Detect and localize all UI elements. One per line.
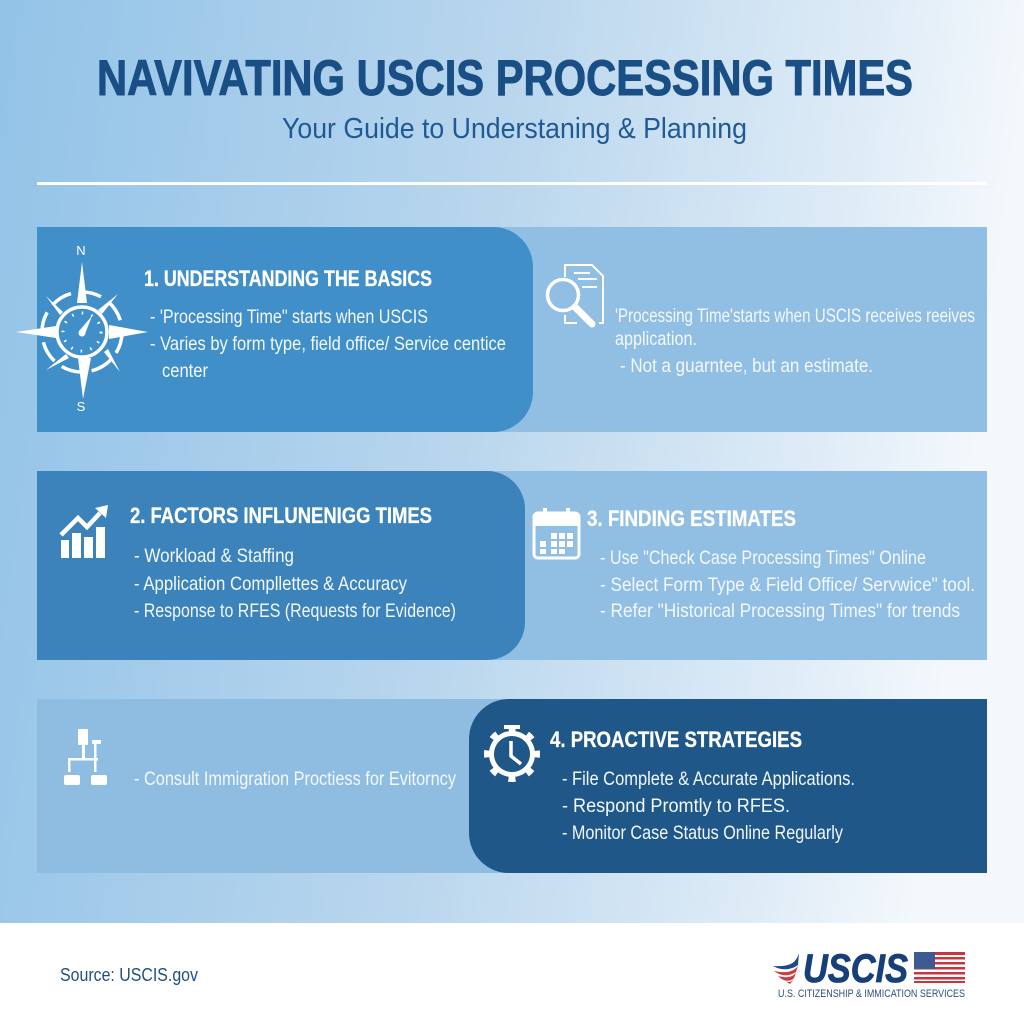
heading 1: 1. UNDERSTANDING THE BASICS <box>144 266 432 291</box>
icon: wing <box>773 953 799 984</box>
icon: compass: N <box>76 243 86 258</box>
heading 4: 4. PROACTIVE STRATEGIES <box>550 727 802 752</box>
subtitle: Your Guide to Understaning & Planning <box>282 113 747 145</box>
footer <box>0 923 1024 1024</box>
source: Source: USCIS.gov <box>60 965 198 985</box>
icon: flow diagram <box>64 729 107 785</box>
panel: proactive strategies <box>469 699 987 873</box>
bullets 1: center <box>162 360 208 382</box>
bullets 4: - File Complete & Accurate Applications. <box>562 768 855 790</box>
panel: row 2 <box>37 471 987 660</box>
icon: document with magnifier <box>548 265 603 324</box>
bullets 3: - Use "Check Case Processing Times" Online <box>600 547 926 569</box>
heading 3: 3. FINDING ESTIMATES <box>587 506 796 531</box>
text: processing time note: application. <box>615 328 697 350</box>
icon: gear clock <box>487 727 537 779</box>
bullets 1 <box>150 306 506 382</box>
panel: factors influencing times <box>37 471 525 660</box>
bullets 4: - Monitor Case Status Online Regularly <box>562 822 843 844</box>
bullets 2: - Workload & Staffing <box>134 545 294 567</box>
heading 2: 2. FACTORS INFLUNENIGG TIMES <box>130 503 432 528</box>
icon: bar chart with arrow <box>61 505 108 558</box>
bullets 3 <box>600 547 975 622</box>
bullets 1: - 'Processing Time" starts when USCIS <box>150 306 428 328</box>
bullets 4 <box>562 768 855 844</box>
icon: compass <box>16 243 148 414</box>
bullets 1: - Varies by form type, field office/ Service centice <box>150 333 506 355</box>
panel: row 1 <box>16 227 987 432</box>
panel: understanding the basics <box>16 227 533 432</box>
logo subtitle: U.S. CITIZENSHIP & IMMICATION SERVICES <box>778 988 965 1000</box>
panel: row 3 <box>37 699 987 873</box>
text: processing time note: - Not a guarntee, but an estimate. <box>620 355 873 377</box>
bullets 3: - Select Form Type & Field Office/ Servwice" tool. <box>600 574 975 596</box>
text: processing time note <box>615 305 975 377</box>
icon: calendar <box>534 508 579 558</box>
text: consult immigration: - Consult Immigration Proctiess for Evitorncy <box>134 768 456 790</box>
bullets 4: - Respond Promtly to RFES. <box>562 795 790 817</box>
bullets 2 <box>134 545 456 622</box>
wordmark: USCIS <box>803 947 908 991</box>
bullets 2: - Application Compllettes & Accuracy <box>134 573 407 595</box>
icon: flag <box>914 952 965 983</box>
bullets 2: - Response to RFES (Requests for Evidence) <box>134 600 456 622</box>
icon: compass: S <box>77 399 86 414</box>
logo: USCIS <box>773 947 965 1000</box>
bullets 3: - Refer "Historical Processing Times" for trends <box>600 600 960 622</box>
